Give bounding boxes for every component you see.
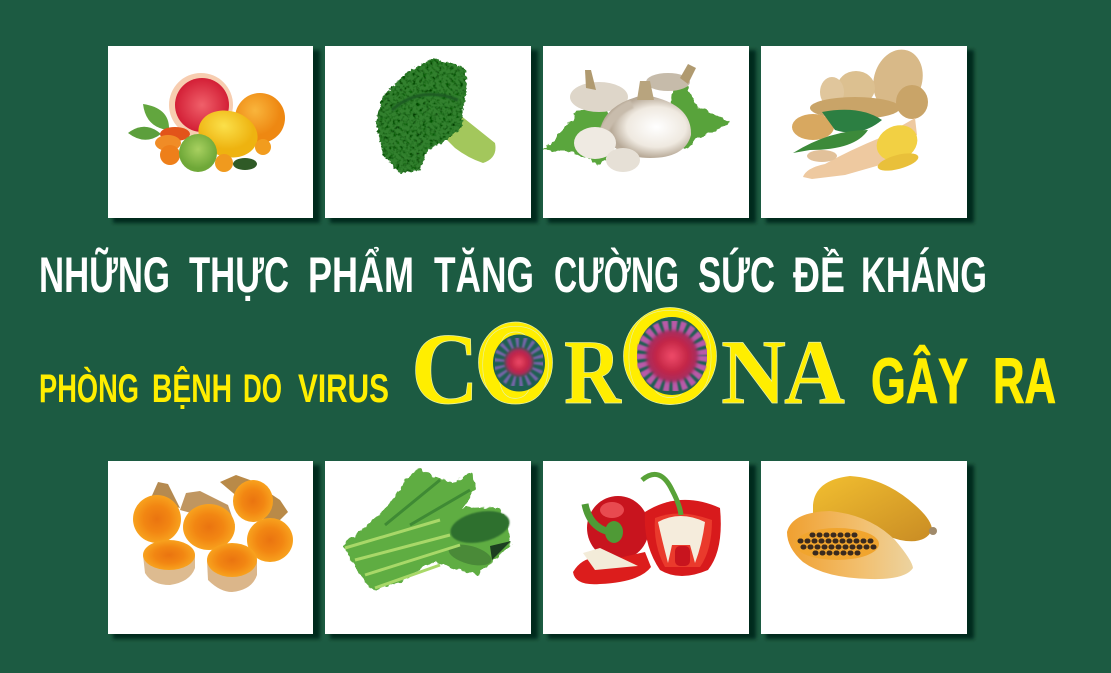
word: CORONA with virus letters: N [721,321,786,423]
card: turmeric [108,461,320,639]
icon: small virus [493,334,545,392]
card: leafy greens [325,461,538,639]
card: red peppers [543,461,756,639]
heading line 1: PHẨM [308,247,414,303]
heading line 1 [39,246,987,303]
word: CORONA with virus letters: O [478,301,553,429]
heading line 2 right: RA [993,345,1056,417]
heading line 1: SỨC [698,247,775,303]
heading line 1: CƯỜNG [554,247,679,303]
heading line 2 left: DO [243,367,282,411]
heading line 2 left: BỆNH [152,365,232,411]
heading line 2 right: GÂY [871,344,968,417]
heading line 1: NHỮNG [39,246,170,303]
word: CORONA with virus letters: A [784,321,845,423]
word: CORONA with virus letters: O [623,279,717,434]
card: ginger [761,43,974,223]
card: citrus fruits [108,46,320,223]
card: garlic [543,46,756,223]
card: broccoli [325,46,538,223]
word: CORONA with virus letters [411,279,845,434]
word: CORONA with virus letters: R [564,321,622,423]
heading line 1: TĂNG [434,247,534,303]
word: CORONA with virus letters: C [411,313,479,426]
heading line 2 left: PHÒNG [39,365,139,411]
heading line 1: THỰC [189,247,289,303]
heading line 1: ĐỀ [793,247,845,303]
icon: large virus [637,317,707,395]
heading line 2 left [39,365,389,411]
heading line 2 left: VIRUS [298,367,389,411]
card: papaya [761,461,974,639]
heading line 1: KHÁNG [861,247,987,303]
